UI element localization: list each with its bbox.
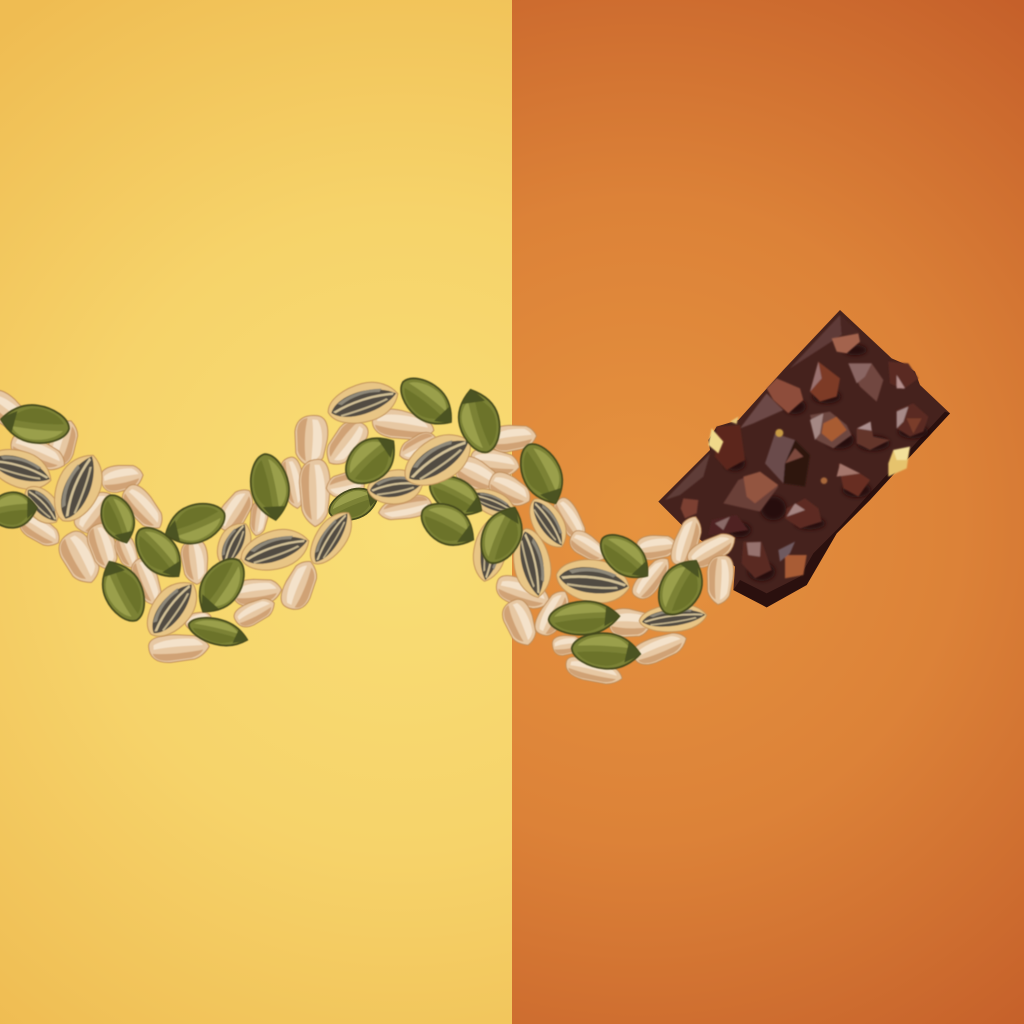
panel: yellow background xyxy=(0,0,512,1024)
nuts embedded in bar xyxy=(681,333,928,578)
bar body xyxy=(658,310,950,607)
panel: orange background xyxy=(512,0,1024,1024)
striped sunflower seeds xyxy=(0,375,708,646)
pale nut pieces on bar edge xyxy=(708,428,910,477)
chocolate bar with nuts xyxy=(658,310,950,607)
green pumpkin seeds xyxy=(0,368,713,672)
kernels: shelled sunflower seeds xyxy=(0,385,741,689)
pumpkin seed tucked under stripes xyxy=(325,481,383,527)
bar facets xyxy=(665,315,860,500)
nut shadows xyxy=(725,345,928,581)
bar broken dark edge xyxy=(733,412,950,607)
